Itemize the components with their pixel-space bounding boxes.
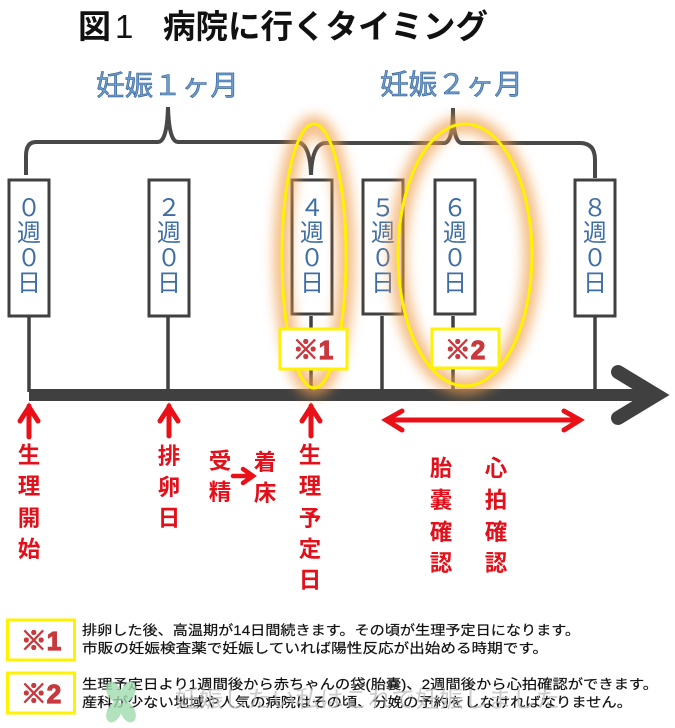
- brace: month 1: [26, 107, 311, 175]
- label: 生理予定日: 定: [299, 537, 321, 562]
- week box: 2: [149, 180, 189, 316]
- label: 生理予定日: [299, 443, 321, 593]
- label: 着床: [254, 450, 277, 506]
- week box: 5: [363, 180, 403, 314]
- week box: 2: 日: [157, 263, 181, 298]
- week box: 4: 週: [300, 213, 324, 248]
- note 2 tag: [8, 673, 74, 713]
- label: 心拍確認: 拍: [485, 488, 507, 513]
- note 1 tag: [8, 620, 74, 660]
- week box: 0: ０: [17, 188, 41, 223]
- week box: 2: ２: [157, 188, 181, 223]
- title: 1: [115, 8, 133, 45]
- label: 生理開始: 開: [18, 506, 40, 531]
- week box: 0: ０: [17, 238, 41, 273]
- week box: 4: 日: [300, 263, 324, 298]
- callout tag: note 1: [280, 329, 347, 369]
- red arrow: ovulation: [160, 406, 178, 436]
- icon: clover: [103, 679, 139, 725]
- red double arrow: confirmation period: [386, 411, 580, 430]
- note 1 text: 市販の妊娠検査薬で妊娠していれば陽性反応が出始める時期です。: [82, 641, 548, 656]
- label: 生理予定日: 予: [299, 506, 321, 531]
- week box: 8: 日: [583, 263, 607, 298]
- red arrow: fertilization to implantation: [233, 469, 253, 483]
- label: 生理開始: [18, 443, 41, 562]
- label: 着床: 着: [254, 450, 276, 475]
- red arrow: expected period: [302, 406, 320, 436]
- week box: 8: 週: [583, 213, 607, 248]
- label: 生理予定日: 生: [299, 443, 321, 468]
- week box: 8: [575, 180, 615, 316]
- note 2 text: 生理予定日より1週間後から赤ちゃんの袋(胎嚢)、2週間後から心拍確認ができます。: [82, 677, 658, 692]
- title: 図: [78, 8, 111, 45]
- week box: 0: 日: [17, 263, 41, 298]
- note 2: [8, 673, 658, 713]
- week box: 0: 週: [17, 213, 41, 248]
- title: 病院に行くタイミング: [163, 8, 488, 45]
- label: 胎嚢確認: 確: [430, 520, 452, 545]
- label: 心拍確認: 確: [485, 520, 507, 545]
- note 1 text: [82, 622, 580, 656]
- note 2 text: [82, 677, 658, 710]
- brace: month 2: [311, 108, 595, 178]
- note 1 text: 排卵した後、高温期が14日間続きます。その頃が生理予定日になります。: [82, 622, 580, 638]
- note 2 text: 産科が少ない地域や人気の病院はその頃、分娩の予約をしなければなりません。: [82, 695, 632, 710]
- label: 受精: [209, 449, 231, 505]
- label: 胎嚢確認: 胎: [430, 456, 453, 481]
- watermark text: 妊娠したい私はこれで妊娠しました: [175, 686, 560, 712]
- label: 生理開始: 理: [18, 474, 40, 499]
- week box: 5: ５: [371, 188, 395, 223]
- label: 心拍確認: 心: [485, 456, 508, 481]
- label: 排卵日: 卵: [158, 475, 180, 500]
- heading: pregnancy month 1: 妊娠１ヶ月: [96, 64, 239, 104]
- note 1: [8, 620, 580, 660]
- week box: 6: [435, 180, 475, 314]
- heading: pregnancy month 2: 妊娠２ヶ月: [380, 63, 523, 103]
- week box: 5: ０: [371, 238, 395, 273]
- week box: 8: ０: [583, 238, 607, 273]
- label: 着床: 床: [254, 481, 277, 506]
- week box: 6: 週: [443, 213, 467, 248]
- label: 生理予定日: 日: [299, 568, 321, 593]
- week box: 5: 週: [371, 213, 395, 248]
- highlight ellipse: week 4: [282, 124, 346, 388]
- label: 生理開始: 生: [18, 443, 40, 468]
- week box: 4: ０: [300, 238, 324, 273]
- week box: 6: 日: [443, 263, 467, 298]
- week box: 5: 日: [371, 263, 395, 298]
- week box: 8: ８: [583, 188, 607, 223]
- label: 排卵日: 日: [158, 506, 180, 531]
- label: 胎嚢確認: [430, 456, 453, 576]
- timeline arrow: [29, 372, 656, 418]
- week box: 2: ０: [157, 238, 181, 273]
- label: 心拍確認: [485, 456, 508, 576]
- timeline stems: [29, 316, 595, 392]
- label: 胎嚢確認: 嚢: [430, 488, 452, 513]
- label: 生理予定日: 理: [299, 474, 321, 499]
- week box: 4: [292, 180, 332, 314]
- note 2 tag: ※2: [21, 679, 61, 709]
- week box: 4: ４: [300, 188, 324, 223]
- label: 生理開始: 始: [18, 537, 41, 562]
- callout tag: note 2: ※2: [445, 335, 485, 365]
- label: 排卵日: [158, 444, 180, 531]
- label: 受精: 受: [209, 449, 231, 474]
- label: 受精: 精: [209, 480, 231, 505]
- highlight ellipse: week 6: [398, 124, 532, 386]
- week box: 2: 週: [157, 213, 181, 248]
- week box: 6: ０: [443, 238, 467, 273]
- label: 心拍確認: 認: [485, 551, 508, 576]
- callout tag: note 1: ※1: [293, 335, 333, 365]
- watermark: [103, 679, 560, 725]
- red arrow: period start: [20, 406, 38, 437]
- week box: 0: [9, 180, 49, 316]
- note 1 tag: ※1: [21, 626, 61, 656]
- label: 胎嚢確認: 認: [430, 551, 453, 576]
- label: 排卵日: 排: [158, 444, 180, 469]
- week box: 6: ６: [443, 188, 467, 223]
- callout tag: note 2: [432, 329, 499, 368]
